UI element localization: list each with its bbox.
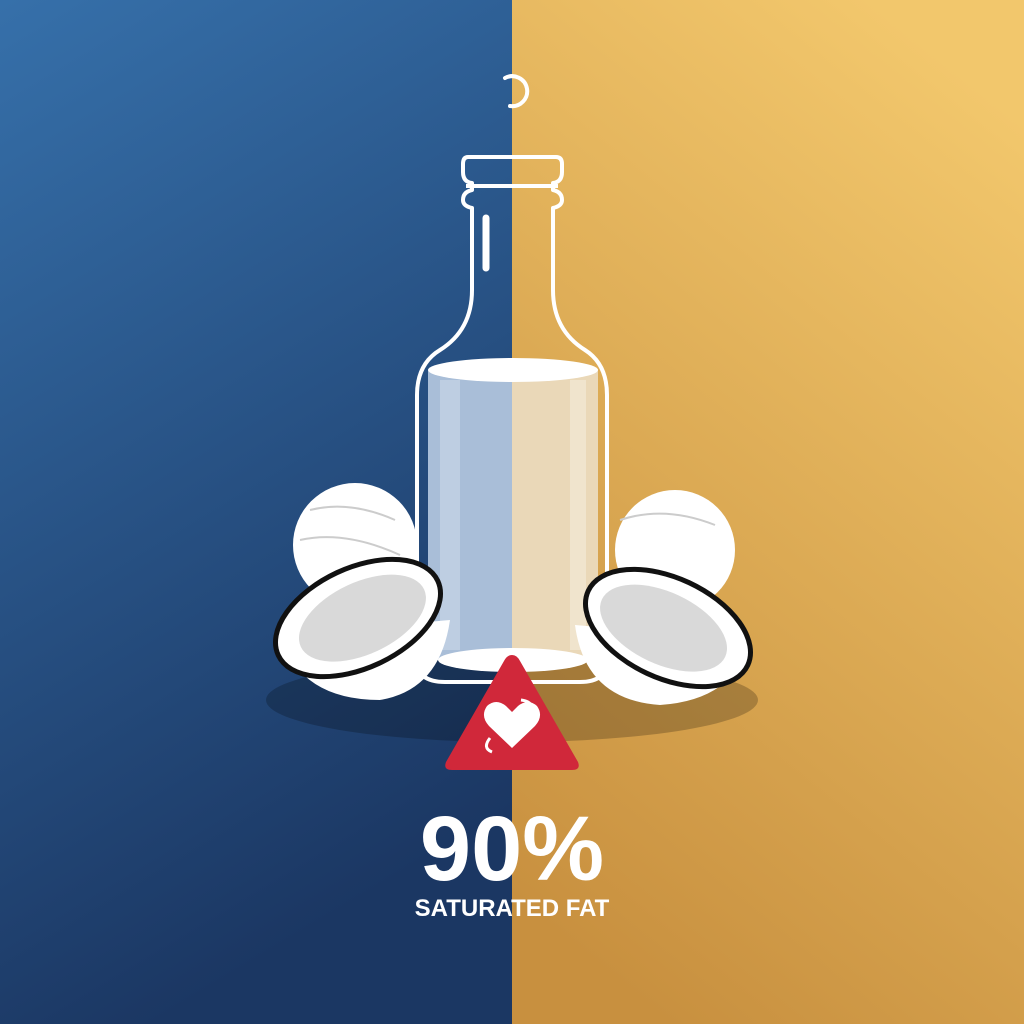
bottle outline — [417, 157, 607, 682]
label: saturated fat: SATURATED FAT — [415, 895, 610, 922]
background: gold right half — [512, 0, 1024, 1024]
shadow under bottle — [266, 658, 758, 742]
coconut: left — [257, 483, 459, 701]
bottle liquid — [428, 358, 598, 672]
icon: crescent — [505, 76, 527, 106]
warning triangle with heart — [445, 655, 579, 770]
stat: 90%: 90% — [420, 798, 604, 900]
background: blue left half — [0, 0, 512, 1024]
coconut: right — [567, 490, 769, 711]
